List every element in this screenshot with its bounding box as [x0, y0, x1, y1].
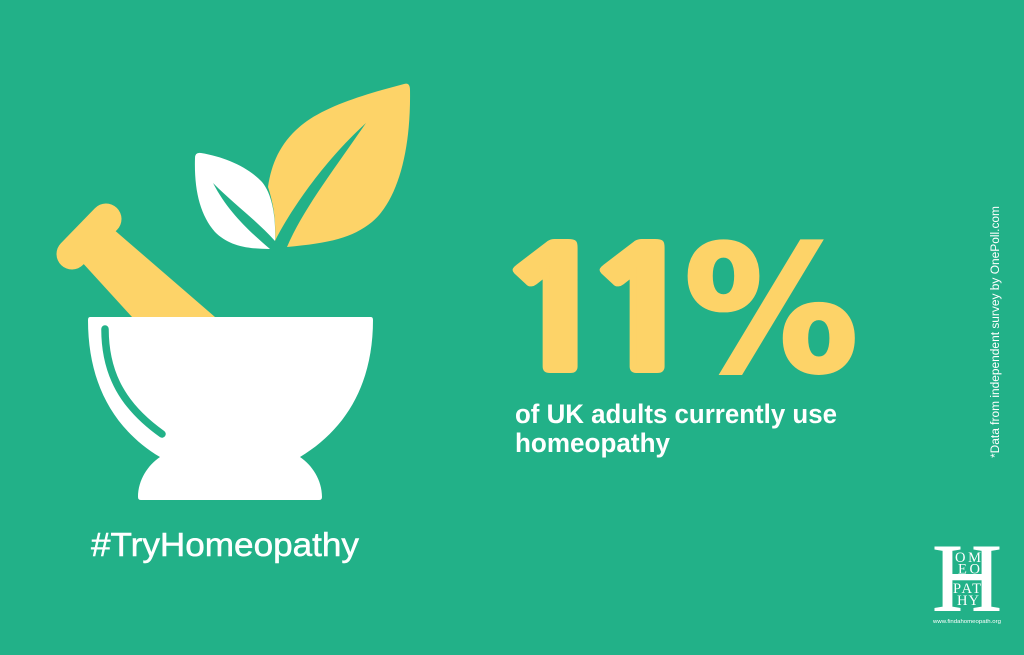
statistic: 11%: 1 — [495, 228, 617, 394]
logo: homeopathy: H — [932, 525, 1002, 632]
icon: yellow leaf — [268, 84, 410, 247]
icon: leaves — [195, 84, 410, 249]
hashtag: #TryHomeopathy — [91, 526, 360, 563]
icon: white leaf — [195, 153, 275, 249]
pestle — [72, 219, 215, 317]
logo: homeopathy: OM — [955, 550, 981, 566]
logo: homeopathy: HY — [957, 593, 980, 609]
statistic caption — [515, 399, 837, 458]
logo: homeopathy: www.findahomeopath.org — [932, 619, 1001, 625]
mortar bowl — [88, 317, 373, 500]
statistic: 11% — [495, 210, 858, 412]
statistic: 11%: 1 — [582, 228, 704, 394]
icon: mortar and pestle — [72, 219, 373, 500]
logo: homeopathy: PAT — [953, 581, 981, 597]
logo: homeopathy: EO — [958, 562, 980, 578]
statistic caption: of UK adults currently use — [515, 399, 837, 429]
source note: *Data from independent survey by OnePoll.com — [990, 206, 1002, 458]
statistic: 11%: % — [684, 210, 858, 412]
mortar highlight — [105, 329, 162, 434]
statistic caption: homeopathy — [515, 428, 670, 458]
